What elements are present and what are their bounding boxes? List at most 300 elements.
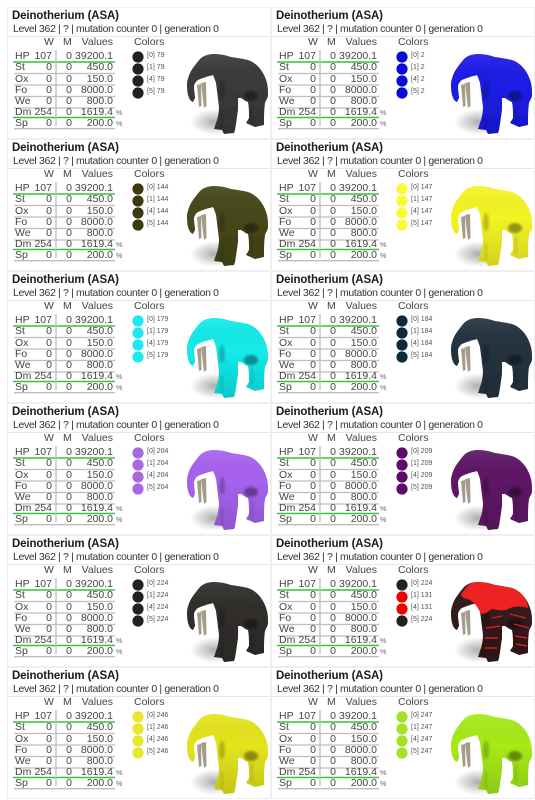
stats table: 800.0 [351, 95, 377, 107]
subtitle: Level 362 | ? | mutation counter 0 | generation 0 [277, 155, 483, 167]
color legend [396, 696, 433, 759]
color legend: Colors [398, 696, 428, 708]
stats table: 254 [34, 634, 52, 646]
stats table: % [116, 517, 122, 524]
stats table: 0 [46, 755, 52, 767]
stats table: W [44, 564, 54, 576]
stats table [13, 564, 122, 657]
stats table: 0 [310, 721, 316, 733]
stats table: 0 [310, 337, 316, 349]
stats table: Dm [279, 766, 296, 778]
stats table: 0 [310, 491, 316, 503]
stats table [13, 36, 122, 129]
color legend: Colors [398, 36, 428, 48]
panel: card 7, color 204 [8, 404, 270, 534]
stats table: 0 [330, 755, 336, 767]
stats table: We [15, 623, 31, 635]
stats table: 0 [310, 193, 316, 205]
color legend: Colors [398, 564, 428, 576]
stats table: HP [15, 710, 30, 722]
color legend: [5] 209 [411, 484, 433, 491]
panel: card 11, color 246 [8, 668, 270, 798]
stats table: 0 [46, 61, 52, 73]
stats table: 200.0 [87, 513, 113, 525]
stats table: 0 [66, 513, 72, 525]
heading: Deinotherium (ASA) [276, 142, 383, 154]
color legend: [4] 246 [147, 736, 169, 743]
color legend: Colors [134, 36, 164, 48]
color legend [396, 168, 433, 231]
color legend: [1] 246 [147, 724, 169, 731]
stats table: 450.0 [87, 61, 113, 73]
stats table: St [15, 193, 25, 205]
heading: Deinotherium (ASA) [276, 406, 383, 418]
stats table: % [116, 770, 122, 777]
color legend: [4] 131 [411, 604, 433, 611]
stats table: 0 [66, 502, 72, 514]
color legend: [4] 209 [411, 472, 433, 479]
stats table: 0 [330, 95, 336, 107]
stats table: Fo [279, 216, 291, 228]
stats table: HP [279, 182, 294, 194]
stats table: 0 [330, 325, 336, 337]
stats table: 0 [46, 216, 52, 228]
color legend: Colors [134, 168, 164, 180]
stats table: 0 [66, 777, 72, 789]
stats table: 150.0 [351, 469, 377, 481]
color legend: Colors [134, 432, 164, 444]
stats table: 0 [66, 325, 72, 337]
stats table: M [63, 432, 72, 444]
stats table: 800.0 [87, 359, 113, 371]
icon: deinotherium [187, 714, 268, 795]
color legend: [0] 204 [147, 448, 169, 455]
stats table: 0 [66, 733, 72, 745]
stats table: 0 [46, 325, 52, 337]
stats table: Fo [15, 348, 27, 360]
stats table: 0 [66, 205, 72, 217]
stats table: M [63, 168, 72, 180]
stats table: % [116, 253, 122, 260]
stats table: 0 [330, 182, 336, 194]
stats table: 0 [310, 589, 316, 601]
icon: deinotherium [187, 54, 268, 135]
stats table: % [380, 253, 386, 260]
color legend: [5] 224 [411, 616, 433, 623]
stats table: 150.0 [351, 205, 377, 217]
stats table: 0 [46, 645, 52, 657]
stats table: Sp [15, 777, 28, 789]
stats table: 254 [34, 238, 52, 250]
stats table: 800.0 [87, 623, 113, 635]
stats table: 0 [310, 227, 316, 239]
stats table: 0 [310, 480, 316, 492]
stats table: 200.0 [351, 645, 377, 657]
stats table: 1619.4 [81, 370, 113, 382]
stats table: 0 [66, 755, 72, 767]
stats table: 200.0 [87, 249, 113, 261]
stats table: Values [346, 696, 377, 708]
color legend: [5] 204 [147, 484, 169, 491]
stats table: 200.0 [351, 249, 377, 261]
stats table: 150.0 [351, 733, 377, 745]
stats table: Values [346, 432, 377, 444]
stats table: 0 [330, 744, 336, 756]
stats table: 800.0 [87, 755, 113, 767]
stats table: Values [346, 300, 377, 312]
stats table: HP [279, 50, 294, 62]
stats table: 107 [298, 50, 316, 62]
stats table: 0 [66, 227, 72, 239]
stats table: HP [279, 578, 294, 590]
stats table: Ox [15, 73, 29, 85]
stats table: 0 [330, 469, 336, 481]
stats table: Dm [279, 370, 296, 382]
subtitle: Level 362 | ? | mutation counter 0 | generation 0 [13, 419, 219, 431]
stats table: Sp [15, 645, 28, 657]
stats table: 0 [310, 117, 316, 129]
stats table: % [116, 649, 122, 656]
subtitle: Level 362 | ? | mutation counter 0 | generation 0 [13, 287, 219, 299]
stats table: % [380, 649, 386, 656]
stats table: Dm [279, 238, 296, 250]
stats table: 254 [298, 238, 316, 250]
stats table: 0 [310, 381, 316, 393]
icon: deinotherium [451, 714, 532, 795]
stats table: Fo [15, 84, 27, 96]
stats table: 800.0 [87, 491, 113, 503]
stats table: Dm [279, 634, 296, 646]
stats table: 0 [330, 205, 336, 217]
stats table: W [308, 168, 318, 180]
stats table: 107 [298, 314, 316, 326]
stats table: 0 [310, 601, 316, 613]
subtitle: Level 362 | ? | mutation counter 0 | generation 0 [13, 23, 219, 35]
stats table: 107 [298, 710, 316, 722]
stats table: 0 [46, 589, 52, 601]
color legend: [0] 224 [147, 580, 169, 587]
stats table: 0 [330, 370, 336, 382]
panel: card 6, color 184 [272, 272, 534, 402]
color legend: [1] 184 [411, 328, 433, 335]
stats table: 1619.4 [81, 766, 113, 778]
color legend: [1] 79 [147, 64, 165, 71]
color legend: [1] 2 [411, 64, 425, 71]
color legend: [4] 147 [411, 208, 433, 215]
stats table: 39200.1 [339, 578, 377, 590]
heading: Deinotherium (ASA) [12, 670, 119, 682]
stats table: 39200.1 [339, 446, 377, 458]
stats table: 0 [330, 578, 336, 590]
stats table: 0 [330, 766, 336, 778]
color legend: [0] 246 [147, 712, 169, 719]
stats table: Ox [279, 73, 293, 85]
stats table: 39200.1 [339, 50, 377, 62]
stats table: 0 [310, 205, 316, 217]
stats table: 0 [66, 50, 72, 62]
stats table: 0 [46, 73, 52, 85]
stats table: 200.0 [87, 645, 113, 657]
stats table: 0 [66, 710, 72, 722]
subtitle: Level 362 | ? | mutation counter 0 | generation 0 [13, 551, 219, 563]
stats table: 450.0 [351, 61, 377, 73]
stats table: % [380, 121, 386, 128]
stats table: Dm [279, 502, 296, 514]
stats table: 254 [298, 502, 316, 514]
color legend: [1] 204 [147, 460, 169, 467]
stats table: W [44, 432, 54, 444]
stats table: 0 [330, 314, 336, 326]
color legend: [5] 247 [411, 748, 433, 755]
stats table: 0 [310, 777, 316, 789]
stats table: 0 [66, 61, 72, 73]
stats table: Values [346, 168, 377, 180]
stats table: 0 [46, 777, 52, 789]
stats table: 0 [66, 216, 72, 228]
stats table: W [44, 300, 54, 312]
stats table [13, 300, 122, 393]
stats table: 450.0 [87, 589, 113, 601]
stats table: St [279, 721, 289, 733]
stats table: We [15, 227, 31, 239]
color legend [396, 36, 428, 99]
stats table: Sp [15, 117, 28, 129]
icon: deinotherium [187, 450, 268, 531]
stats table: 150.0 [351, 337, 377, 349]
stats table: Sp [279, 117, 292, 129]
stats table: 39200.1 [75, 182, 113, 194]
stats table: 8000.0 [345, 216, 377, 228]
stats table: 0 [46, 601, 52, 613]
stats table: 0 [330, 381, 336, 393]
stats table: 0 [330, 84, 336, 96]
stats table: Sp [279, 381, 292, 393]
stats table: 450.0 [87, 721, 113, 733]
stats table: % [116, 374, 122, 381]
stats table: 800.0 [351, 359, 377, 371]
color legend: [1] 247 [411, 724, 433, 731]
stats table: 0 [66, 84, 72, 96]
stats table: St [279, 457, 289, 469]
stats table: 8000.0 [345, 84, 377, 96]
stats table [13, 168, 122, 261]
stats table: 0 [66, 337, 72, 349]
stats table: 0 [330, 446, 336, 458]
stats table: 0 [46, 612, 52, 624]
stats table: Fo [15, 612, 27, 624]
stats table: 800.0 [351, 755, 377, 767]
stats table: 0 [310, 95, 316, 107]
stats table: 800.0 [351, 623, 377, 635]
stats table: HP [15, 314, 30, 326]
stats table [277, 432, 386, 525]
stats table: HP [279, 446, 294, 458]
stats table: 450.0 [87, 457, 113, 469]
stats table: 107 [34, 578, 52, 590]
stats table: 1619.4 [345, 502, 377, 514]
stats table: M [327, 696, 336, 708]
stats table [277, 696, 386, 789]
stats table: M [327, 564, 336, 576]
stats table: 0 [46, 193, 52, 205]
stats table: Values [82, 300, 113, 312]
stats table: 39200.1 [75, 446, 113, 458]
stats table: 39200.1 [75, 710, 113, 722]
stats table: 0 [46, 744, 52, 756]
stats table: 0 [310, 457, 316, 469]
stats table: 0 [46, 491, 52, 503]
stats table [13, 696, 122, 789]
stats table [277, 300, 386, 393]
color legend: [1] 131 [411, 592, 433, 599]
stats table: 107 [298, 182, 316, 194]
stats table: 0 [330, 227, 336, 239]
heading: Deinotherium (ASA) [12, 538, 119, 550]
color legend: [1] 224 [147, 592, 169, 599]
stats table: 0 [330, 733, 336, 745]
heading: Deinotherium (ASA) [12, 10, 119, 22]
stats table: 0 [310, 733, 316, 745]
stats table: 0 [66, 238, 72, 250]
stats table: 0 [46, 227, 52, 239]
stats table: 0 [330, 589, 336, 601]
stats table: 0 [310, 612, 316, 624]
subtitle: Level 362 | ? | mutation counter 0 | generation 0 [277, 287, 483, 299]
stats table: 8000.0 [81, 744, 113, 756]
heading: Deinotherium (ASA) [276, 10, 383, 22]
stats table: 0 [66, 721, 72, 733]
stats table: St [15, 61, 25, 73]
stats table: 0 [46, 381, 52, 393]
stats table: 450.0 [351, 193, 377, 205]
color legend: [4] 144 [147, 208, 169, 215]
stats table: 254 [298, 370, 316, 382]
stats table: St [279, 61, 289, 73]
stats table: St [15, 457, 25, 469]
color legend [132, 300, 169, 363]
color legend: [0] 2 [411, 52, 425, 59]
stats table: Fo [15, 480, 27, 492]
stats table: 0 [310, 249, 316, 261]
stats table: We [15, 359, 31, 371]
stats table: 0 [330, 348, 336, 360]
stats table: 0 [66, 359, 72, 371]
stats table: 0 [46, 84, 52, 96]
icon: deinotherium [451, 54, 532, 135]
stats table: 0 [330, 193, 336, 205]
stats table: M [327, 432, 336, 444]
stats table: Dm [15, 634, 32, 646]
color legend: [4] 247 [411, 736, 433, 743]
stats table: 0 [46, 457, 52, 469]
stats table: % [116, 110, 122, 117]
subtitle: Level 362 | ? | mutation counter 0 | generation 0 [277, 419, 483, 431]
stats table: 107 [34, 50, 52, 62]
stats table: 0 [66, 95, 72, 107]
color legend: [1] 179 [147, 328, 169, 335]
stats table: Sp [279, 249, 292, 261]
stats table: 107 [34, 182, 52, 194]
stats table: 0 [46, 623, 52, 635]
stats table: 1619.4 [81, 634, 113, 646]
stats table: Dm [15, 502, 32, 514]
stats table: 107 [34, 446, 52, 458]
stats table: Values [82, 564, 113, 576]
stats table: % [380, 374, 386, 381]
stats table: 0 [330, 106, 336, 118]
stats table: Ox [279, 205, 293, 217]
color legend: Colors [398, 300, 428, 312]
stats table: 1619.4 [345, 766, 377, 778]
stats table: 800.0 [351, 491, 377, 503]
heading: Deinotherium (ASA) [12, 274, 119, 286]
stats table [277, 36, 386, 129]
stats table: Sp [15, 249, 28, 261]
stats table: 0 [66, 182, 72, 194]
stats table: 200.0 [351, 777, 377, 789]
stats table: % [380, 517, 386, 524]
stats table: M [63, 564, 72, 576]
stats table: Values [346, 564, 377, 576]
stats table: 200.0 [351, 117, 377, 129]
stats table: Sp [15, 381, 28, 393]
stats table: 0 [46, 359, 52, 371]
panel: card 12, color 247 [272, 668, 534, 798]
color legend: [5] 246 [147, 748, 169, 755]
stats table: Sp [279, 513, 292, 525]
stats table: 0 [66, 589, 72, 601]
stats table: 0 [46, 348, 52, 360]
stats table: 200.0 [87, 777, 113, 789]
stats table: % [116, 638, 122, 645]
stats table: Ox [15, 469, 29, 481]
stats table: 0 [310, 623, 316, 635]
color legend: [4] 2 [411, 76, 425, 83]
stats table: 39200.1 [339, 710, 377, 722]
icon: deinotherium [451, 186, 532, 267]
stats table: 150.0 [351, 73, 377, 85]
stats table: 0 [66, 348, 72, 360]
color legend: [0] 79 [147, 52, 165, 59]
stats table: We [279, 623, 295, 635]
stats table: % [380, 506, 386, 513]
subtitle: Level 362 | ? | mutation counter 0 | generation 0 [277, 23, 483, 35]
stats table: % [116, 242, 122, 249]
color legend: Colors [134, 696, 164, 708]
stats table: We [279, 95, 295, 107]
stats table: 8000.0 [81, 84, 113, 96]
stats table: 39200.1 [75, 578, 113, 590]
stats table: HP [279, 314, 294, 326]
stats table: 0 [330, 50, 336, 62]
stats table: 107 [34, 314, 52, 326]
stats table: 200.0 [351, 381, 377, 393]
stats table: % [116, 121, 122, 128]
stats table: 800.0 [87, 95, 113, 107]
stats table: 39200.1 [75, 314, 113, 326]
heading: Deinotherium (ASA) [12, 142, 119, 154]
stats table: 0 [330, 61, 336, 73]
stats table: 450.0 [351, 721, 377, 733]
stats table: 150.0 [87, 205, 113, 217]
color legend: [0] 147 [411, 184, 433, 191]
stats table: Fo [15, 216, 27, 228]
stats table: 0 [46, 733, 52, 745]
stats table: 8000.0 [345, 348, 377, 360]
stats table: 0 [310, 755, 316, 767]
stats table: Fo [279, 612, 291, 624]
stats table: 200.0 [87, 117, 113, 129]
